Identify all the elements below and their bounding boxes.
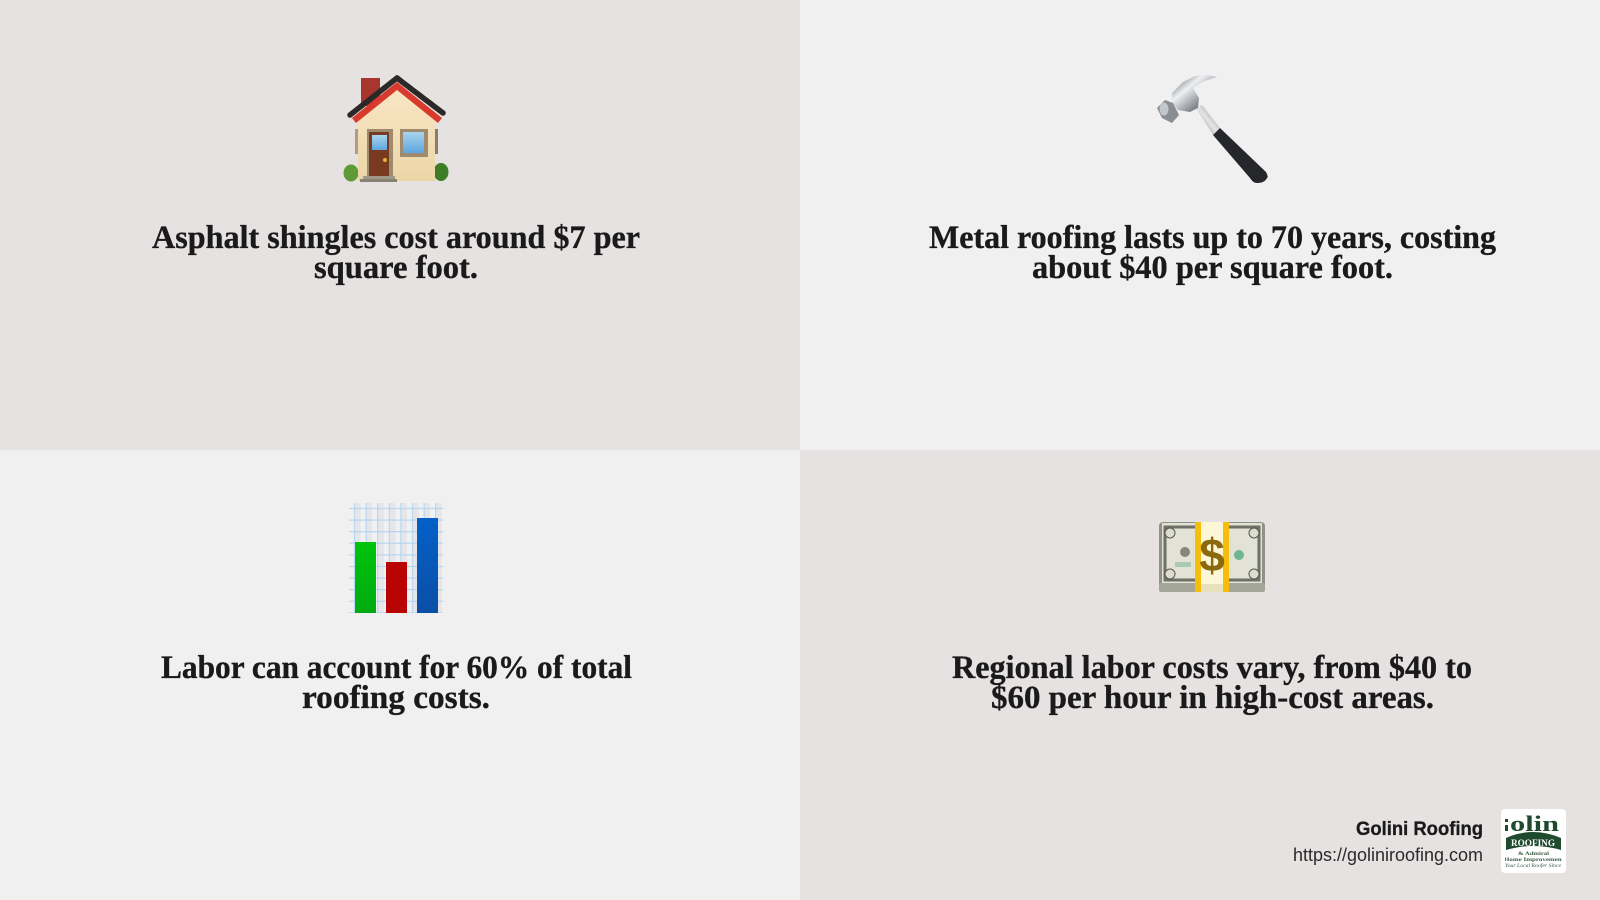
- brand url: https://goliniroofing.com: [1293, 845, 1483, 865]
- panel: asphalt shingles: [0, 0, 800, 450]
- logo: Your Local Roofer Since: [1505, 862, 1562, 869]
- heading: regional labor costs: Regional labor costs vary, from $40 to: [952, 650, 1472, 686]
- logo: [1501, 809, 1566, 873]
- icon: bar chart: [349, 503, 443, 613]
- logo: & Admiral: [1518, 851, 1550, 857]
- heading: regional labor costs: $60 per hour in high-cost areas.: [991, 680, 1434, 716]
- heading: metal roofing: Metal roofing lasts up to 70 years, costing: [929, 220, 1496, 256]
- panel: metal roofing: [800, 0, 1600, 450]
- brand name: Golini Roofing: [1356, 819, 1483, 840]
- heading: asphalt shingles: Asphalt shingles cost around $7 per: [152, 220, 640, 256]
- heading: metal roofing: about $40 per square foot.: [1032, 250, 1393, 286]
- panel: regional labor costs: [800, 450, 1600, 900]
- icon: money stack: $: [1199, 529, 1225, 581]
- icon: money stack: [1159, 522, 1265, 592]
- heading: asphalt shingles: square foot.: [314, 250, 478, 286]
- logo: olin: [1510, 811, 1559, 836]
- icon: hammer: [1157, 75, 1268, 183]
- panel: labor share: [0, 450, 800, 900]
- icon: house: [344, 78, 448, 182]
- heading: labor share: Labor can account for 60% of total: [161, 650, 632, 686]
- heading: labor share: roofing costs.: [302, 680, 490, 716]
- logo: Home Improvement: [1504, 857, 1564, 863]
- logo: ROOFING: [1511, 838, 1555, 848]
